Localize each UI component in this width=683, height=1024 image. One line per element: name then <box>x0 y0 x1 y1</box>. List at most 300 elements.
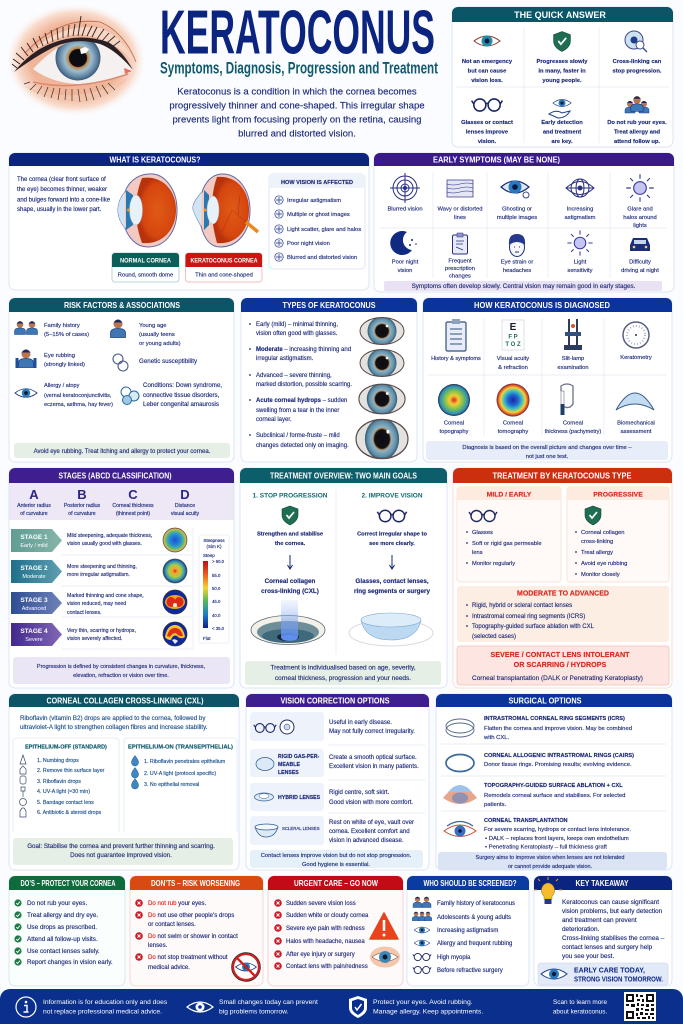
goal 2: improve vision: 2. IMPROVE VISION <box>361 492 423 500</box>
note: diagnosis: Diagnosis is based on the overall picture and changes over time – <box>462 445 632 451</box>
abcd header: of curvature <box>68 511 96 517</box>
panel: don'ts <box>130 876 263 986</box>
option: glasses <box>250 712 415 741</box>
takeaway text: deterioration. <box>562 926 600 933</box>
quick answer texts: Progresses slowly <box>537 59 588 65</box>
illustration: cxl eye <box>251 600 325 644</box>
card: mild / early: Soft or rigid gas permeable <box>472 541 542 547</box>
illustration: contact lens <box>349 613 433 646</box>
note: symptoms develop slowly: Symptoms often develop slowly. Central vision may remain good in early stages. <box>412 283 636 290</box>
card: moderate to advanced <box>457 586 669 642</box>
note: treatment individualised <box>245 661 441 685</box>
icon: warning triangle <box>370 913 398 939</box>
box: how vision is affected: HOW VISION IS AFFECTED <box>281 180 353 186</box>
abcd header: Posterior radius <box>64 503 101 509</box>
card: severe <box>457 646 669 685</box>
footer bar <box>0 989 683 1024</box>
panel: the quick answer <box>452 7 673 147</box>
takeaway text: vision problems, but early detection <box>562 908 663 915</box>
type descriptions: irregular astigmatism. <box>256 356 314 362</box>
note: avoid eye rubbing: Avoid eye rubbing. Treat itching and allergy to protect your cornea. <box>34 449 211 455</box>
option: transplantation: • Penetrating Keratoplasty – full thickness graft <box>485 844 607 850</box>
option: transplantation: CORNEAL TRANSPLANTATION <box>484 818 568 824</box>
icon: prescription clipboard <box>452 233 468 254</box>
option: icrs: with CXL. <box>483 735 510 741</box>
card: progressive: cross-linking <box>581 539 613 545</box>
panel: stages abcd <box>9 468 234 688</box>
icon: eye chart: E <box>510 322 517 333</box>
heading: cxl: CORNEAL COLLAGEN CROSS-LINKING (CXL) <box>46 696 204 706</box>
intro text: Keratoconus is a condition in which the cornea becomes <box>177 86 417 98</box>
card: severe: Corneal transplantation (DALK or Penetrating Keratoplasty) <box>472 675 643 682</box>
card: progressive: Treat allergy <box>581 550 613 556</box>
diagnosis labels: tomography <box>498 429 528 435</box>
epithelium-off box: 5. Bandage contact lens <box>37 800 94 806</box>
abcd header: Corneal thickness <box>112 503 154 509</box>
stage 2: more irregular astigmatism. <box>67 572 130 578</box>
screening list: Increasing astigmatism <box>437 928 498 934</box>
goal 1: stop progression: the cornea. <box>275 541 306 547</box>
icon: corneal topography <box>438 384 470 416</box>
stage 3 <box>11 590 187 616</box>
definition text: shape, usually in the lower part. <box>17 207 102 213</box>
card: progressive: PROGRESSIVE <box>593 492 643 498</box>
stage 1: Early / mild <box>20 543 48 549</box>
cxl intro: Riboflavin (vitamin B2) drops are applied to the cornea, followed by <box>20 715 206 722</box>
symptom labels: changes <box>449 274 471 280</box>
heading: what is keratoconus: WHAT IS KERATOCONUS? <box>110 154 200 164</box>
screening list: Adolescents & young adults <box>437 915 511 921</box>
risk: conditions: connective tissue disorders, <box>143 392 220 399</box>
screening list: High myopia <box>437 955 471 961</box>
abcd header: Anterior radius <box>17 503 51 509</box>
do's list: Do not rub your eyes. <box>27 900 87 907</box>
quick answer texts: Cross-linking can <box>613 59 662 65</box>
icon: shield <box>554 32 570 52</box>
note: treatment individualised: Treatment is individualised based on age, severity, <box>270 664 416 672</box>
heading: urgent care: URGENT CARE – GO NOW <box>294 878 378 888</box>
risk: conditions <box>143 382 222 408</box>
footer: small changes: big problems tomorrow. <box>219 1008 289 1016</box>
panel: key takeaway <box>534 876 672 986</box>
risk: young age: Young age <box>139 323 167 329</box>
note: goal <box>13 838 233 865</box>
subtitle: Symptoms, Diagnosis, Progression and Treatment <box>160 60 438 78</box>
note: diagnosis: not just one test. <box>526 454 569 460</box>
epithelium-on box: 1. Riboflavin penetrates epithelium <box>144 759 226 765</box>
intro text: progressively thinner and cone-shaped. This irregular shape <box>169 100 425 112</box>
label: keratoconus cornea <box>186 253 262 282</box>
panel: do's <box>9 876 125 986</box>
icon: cross-linking eye <box>625 31 647 52</box>
heading: don'ts: DON’TS – RISK WORSENING <box>151 878 240 888</box>
screening list: Allergy and frequent rubbing <box>437 941 512 947</box>
option: glasses: Useful in early disease. <box>329 719 392 726</box>
do's list: Use contact lenses safely. <box>27 948 100 955</box>
panel: who should be screened <box>407 876 529 986</box>
steepness legend: Steepness <box>203 538 225 543</box>
risk: allergy <box>44 383 113 408</box>
definition text <box>17 177 111 213</box>
symptom labels: driving at night <box>621 268 659 274</box>
icon: eye <box>370 946 400 968</box>
option: hybrid: Good vision with more comfort. <box>329 799 413 806</box>
icon: target / blurred vision <box>390 173 420 203</box>
footer: small changes <box>219 999 318 1016</box>
box: how vision is affected: Multiple or ghost images <box>287 212 350 218</box>
risk: eye rubbing: (strongly linked) <box>44 362 85 368</box>
icon: shield <box>349 996 367 1018</box>
note: progression: elevation, refraction or vision over time. <box>73 673 169 679</box>
icon: ghost eye <box>501 180 529 198</box>
steepness legend: 45.0 <box>212 599 221 604</box>
card: severe: OR SCARRING / HYDROPS <box>514 660 607 669</box>
stage 1: Mild steepening, adequate thickness, <box>67 533 152 539</box>
diagnosis labels <box>431 355 655 435</box>
epithelium-on box: 2. UV-A light (protocol specific) <box>144 771 216 777</box>
takeaway text: and treatment can prevent <box>562 917 637 924</box>
abcd header: C <box>128 487 138 502</box>
epithelium-on box <box>124 738 237 832</box>
quick answer texts: vision loss. <box>471 78 503 84</box>
heading: types: TYPES OF KERATOCONUS <box>282 300 376 310</box>
stage 1 <box>11 528 187 552</box>
footer: information: not replace professional medical advice. <box>43 1008 162 1016</box>
epithelium-on box: EPITHELIUM-ON (TRANSEPITHELIAL) <box>128 744 233 750</box>
epithelium-on box: 3. No epithelial removal <box>144 782 199 788</box>
card: moderate to advanced: Intrastromal corneal ring segments (ICRS) <box>472 614 585 620</box>
icon: conditions <box>121 387 139 404</box>
card: mild / early <box>457 487 561 582</box>
stage 3: vision reduced, may need <box>67 601 126 607</box>
epithelium-off box <box>13 738 119 832</box>
don'ts list: Do not rub your eyes. <box>148 900 207 907</box>
card: mild / early: lens <box>472 550 483 556</box>
symptom labels: prescription <box>445 266 475 272</box>
icon: young person <box>110 320 126 338</box>
note: progression: Progression is defined by consistent changes in curvature, thickness, <box>37 664 206 670</box>
abcd header: B <box>77 487 87 502</box>
type descriptions: swelling from a tear in the inner <box>256 408 339 414</box>
label: normal cornea: Round, smooth dome <box>118 272 173 278</box>
symptom labels: Blurred vision <box>387 206 423 212</box>
abcd header: visual acuity <box>171 511 200 517</box>
heading: early symptoms: EARLY SYMPTOMS (MAY BE NONE) <box>433 154 560 164</box>
steepness legend: 55.0 <box>212 573 221 578</box>
icon: family <box>14 321 38 334</box>
symptom labels: Wavy or distorted <box>438 206 482 212</box>
panel: surgical options <box>436 694 672 870</box>
don'ts list: lenses. <box>148 942 168 949</box>
stage 1: vision usually good with glasses. <box>67 541 142 547</box>
symptom labels: lights <box>633 223 647 229</box>
stage 2: Moderate <box>22 574 46 580</box>
risk: conditions: Leber congenital amaurosis <box>143 401 219 408</box>
box: how vision is affected: Poor night vision <box>287 241 330 247</box>
urgent list: Contact lens with pain/redness <box>286 964 368 970</box>
option: hybrid: HYBRID LENSES <box>278 795 321 801</box>
definition text: The cornea (clear front surface of <box>17 177 106 183</box>
card: progressive: Corneal collagen <box>581 530 625 536</box>
definition text: the eye) becomes thinner, weaker <box>17 187 107 193</box>
card: moderate to advanced: Topography-guided surface ablation with CXL <box>472 624 595 630</box>
symptom labels: sensitivity <box>567 268 593 274</box>
option: rigid gas-permeable: LENSES <box>278 770 299 776</box>
panel: urgent care <box>268 876 403 986</box>
note: progression <box>13 657 230 684</box>
steepness legend: Flat <box>203 636 211 641</box>
option: hybrid: Rigid centre, soft skirt. <box>329 789 390 796</box>
type descriptions: Acute corneal hydrops – sudden <box>256 398 347 404</box>
stage 4: Severe <box>25 637 43 643</box>
icon: keratometry dial <box>623 322 649 348</box>
icon: light sensitivity <box>567 230 593 256</box>
option: scleral: Rest on white of eye, vault over <box>329 819 414 826</box>
icon: car <box>630 238 650 251</box>
card: mild / early: Monitor regularly <box>472 561 515 567</box>
box: how vision is affected: Irregular astigmatism <box>287 198 341 204</box>
goal 1: stop progression: Strengthen and stabilise <box>257 532 323 538</box>
goal 2: improve vision: see more clearly. <box>369 541 415 547</box>
heading: who should be screened: WHO SHOULD BE SCREENED? <box>424 878 516 888</box>
risk: young age: (usually teens <box>139 332 175 338</box>
heading: do's: DO’S – PROTECT YOUR CORNEA <box>20 878 116 888</box>
risk: family history: (5–15% of cases) <box>44 332 89 338</box>
note: contact lenses: Contact lenses improve vision but do not stop progression. <box>261 853 412 859</box>
stage 2: STAGE 2 <box>20 565 48 572</box>
diagnosis labels: examination <box>557 365 589 371</box>
abcd header: of curvature <box>20 511 48 517</box>
icon: glasses <box>472 99 502 111</box>
don'ts list: or contact lenses. <box>148 921 196 928</box>
do's list: Use drops as prescribed. <box>27 924 97 931</box>
steepness legend: > 60.0 <box>212 559 225 564</box>
type descriptions: vision often good with glasses. <box>256 331 338 337</box>
card: moderate to advanced: Rigid, hybrid or scleral contact lenses <box>472 603 572 609</box>
option: hybrid <box>250 783 413 811</box>
epithelium-off box: 6. Antibiotic & steroid drops <box>37 810 102 816</box>
panel: treatment by keratoconus type <box>453 468 672 688</box>
label: keratoconus cornea: Thin and cone-shaped <box>195 272 253 278</box>
symptom labels: Increasing <box>567 206 593 212</box>
don'ts list: Do not stop treatment without <box>148 954 228 961</box>
card: progressive: Avoid eye rubbing <box>581 561 627 567</box>
risk: genetic susceptibility: Genetic susceptibility <box>139 358 198 365</box>
card: mild / early: Glasses <box>472 530 493 536</box>
quick answer texts <box>461 59 667 145</box>
panel: cross-linking <box>9 694 239 870</box>
box: how vision is affected: Blurred and distorted vision <box>287 255 357 261</box>
option: cairs: Donor tissue rings. Promising results; evolving evidence. <box>484 762 632 768</box>
heading: diagnosed: HOW KERATOCONUS IS DIAGNOSED <box>474 300 610 310</box>
risk: young age <box>139 323 181 347</box>
steepness legend: 40.0 <box>212 613 221 618</box>
card: progressive <box>567 487 669 582</box>
symptom labels: lines <box>454 215 466 221</box>
symptom labels: Difficulty <box>629 260 651 266</box>
urgent list: Sudden severe vision loss <box>286 901 356 907</box>
diagnosis labels: Biomechanical <box>617 420 655 426</box>
heading: quick answer: THE QUICK ANSWER <box>514 10 606 20</box>
screening list <box>412 897 515 974</box>
type descriptions: Advanced – severe thinning, <box>256 373 332 379</box>
steepness legend: 50.0 <box>212 586 221 591</box>
icon: eye rubbing <box>17 350 35 368</box>
note: treatment individualised: corneal thickness, progression and your needs. <box>275 675 411 682</box>
urgent list: Sudden white or cloudy cornea <box>286 913 369 919</box>
takeaway text <box>562 899 665 960</box>
icon: face headache <box>509 234 525 256</box>
symptom labels: astigmatism <box>565 215 596 221</box>
option: scleral: cornea. Excellent comfort and <box>329 828 410 835</box>
type descriptions <box>249 322 352 449</box>
panel: risk factors <box>9 298 234 462</box>
urgent list: Severe eye pain with redness <box>286 926 365 932</box>
intro text: prevents light from focusing properly on the retina, causing <box>172 114 422 126</box>
quick answer texts: stop progression. <box>613 68 662 74</box>
diagnosis labels: Visual acuity <box>497 356 529 362</box>
goal 1: stop progression: Corneal collagen <box>265 578 316 585</box>
qr code <box>624 992 656 1021</box>
stage 3: Advanced <box>22 606 46 612</box>
diagnosis labels: Corneal <box>563 420 583 426</box>
do's list: Treat allergy and dry eye. <box>27 912 98 919</box>
screening list: Family history of keratoconus <box>437 901 515 907</box>
quick answer texts: Treat allergy and <box>614 130 660 136</box>
callout: early care today: EARLY CARE TODAY, <box>574 966 645 974</box>
icon: glare <box>626 174 654 202</box>
footer: scan: about keratoconus. <box>553 1008 607 1016</box>
type descriptions: changes detected only on imaging. <box>256 443 349 449</box>
quick answer texts: lenses improve <box>466 130 509 136</box>
icon: info <box>16 997 36 1017</box>
option: topography-guided: TOPOGRAPHY-GUIDED SURFACE ABLATION + CXL <box>484 783 623 789</box>
abcd header: D <box>180 487 190 502</box>
risk: eye rubbing <box>44 353 85 368</box>
note: surgery aims: or cannot provide adequate vision. <box>508 864 593 870</box>
symptom labels: Ghosting or <box>502 206 532 212</box>
option: glasses: May not fully correct irregularity. <box>329 728 415 735</box>
risk: allergy: (vernal keratoconjunctivitis, <box>44 393 112 399</box>
stage 3: Marked thinning and cone shape, <box>67 593 144 599</box>
symptom labels: halos around <box>623 215 657 221</box>
heading: risk factors: RISK FACTORS & ASSOCIATIONS <box>64 300 180 310</box>
note: contact lenses <box>250 850 423 868</box>
option: topography-guided: patients. <box>484 802 507 808</box>
note: goal: Goal: Stabilise the cornea and prevent further thinning and scarring. <box>27 843 215 850</box>
goal 1: stop progression: cross-linking (CXL) <box>261 588 319 595</box>
icon: eye in hand <box>549 100 571 118</box>
goal 2: improve vision <box>354 492 430 595</box>
footer: scan: Scan to learn more <box>553 999 607 1006</box>
label: normal cornea <box>112 253 179 282</box>
epithelium-off box: 2. Remove thin surface layer <box>37 768 105 774</box>
steepness legend <box>199 535 229 643</box>
icon: slit lamp <box>564 319 582 350</box>
option: rigid gas-permeable: RIGID GAS-PER- <box>278 754 319 760</box>
don'ts list: Do not use other people’s drops <box>148 912 234 919</box>
abcd header: A <box>29 487 39 502</box>
panel: what is keratoconus <box>9 153 369 290</box>
heading: vision correction: VISION CORRECTION OPTIONS <box>280 696 390 706</box>
option: transplantation <box>444 818 631 850</box>
goal 2: improve vision: Correct irregular shape to <box>357 532 427 538</box>
eye: moderate <box>360 348 404 378</box>
stage 3: contact lenses. <box>67 610 102 616</box>
icon: eye chart: T O Z <box>505 342 521 348</box>
icon: do not rub eye <box>232 953 260 981</box>
symptom labels: headaches <box>503 268 531 274</box>
note: symptoms develop slowly <box>384 281 662 291</box>
note: surgery aims: Surgery aims to improve vision when lenses are not tolerated <box>476 855 624 861</box>
don'ts list: Do not swim or shower in contact <box>148 933 238 940</box>
icon: corneal tomography <box>496 384 530 416</box>
option: rigid gas-permeable: Create a smooth optical surface. <box>329 754 417 761</box>
panel: types of keratoconus <box>241 298 417 462</box>
risk: allergy: eczema, asthma, hay fever) <box>44 402 113 408</box>
eye: advanced <box>359 383 405 415</box>
quick answer texts: in many, faster in <box>538 68 586 74</box>
goal 1: stop progression: 1. STOP PROGRESSION <box>253 492 328 500</box>
option: topography-guided: Remodels corneal surface and stabilises. For selected <box>484 793 625 799</box>
stage 4 <box>11 622 187 646</box>
diagnosis labels: History & symptoms <box>431 356 481 362</box>
diagnosis labels: Corneal <box>503 420 523 426</box>
type descriptions: marked distortion, possible scarring. <box>256 382 352 388</box>
screening list: Before refractive surgery <box>437 968 503 974</box>
risk: family history <box>44 323 89 338</box>
takeaway text: Keratoconus can cause significant <box>562 899 659 906</box>
type descriptions: Moderate – increasing thinning and <box>256 347 351 353</box>
diagnosis labels: Keratometry <box>620 355 652 361</box>
cxl intro <box>20 715 208 731</box>
callout: early care today <box>538 963 668 985</box>
symptom labels <box>387 206 659 280</box>
quick answer texts: young people. <box>542 78 582 84</box>
heading: treatment overview: TREATMENT OVERVIEW: TWO MAIN GOALS <box>270 470 417 480</box>
icon: eye <box>474 36 500 46</box>
option: cairs <box>446 753 634 772</box>
epithelium-off box: 3. Riboflavin drops <box>37 779 81 785</box>
heading: surgical options: SURGICAL OPTIONS <box>508 696 582 706</box>
risk: allergy: Allergy / atopy <box>44 383 80 389</box>
option: icrs <box>446 716 632 741</box>
symptom labels: Frequent <box>448 258 472 264</box>
note: contact lenses: Good hygiene is essential. <box>302 862 370 868</box>
do's list: Attend all follow-up visits. <box>27 936 98 943</box>
symptom labels: Eye strain or <box>501 260 533 266</box>
footer: protect your eyes: Manage allergy. Keep appointments. <box>373 1008 483 1016</box>
option: scleral: SCLERAL LENSES <box>282 826 320 831</box>
risk: eye rubbing: Eye rubbing <box>44 353 75 359</box>
icon: genes <box>113 354 128 371</box>
stage 3: STAGE 3 <box>20 597 48 604</box>
symptom labels: Light <box>574 260 587 266</box>
quick answer texts: and treatment <box>543 130 581 136</box>
note: avoid eye rubbing <box>14 443 230 458</box>
steepness legend: (Sim K) <box>206 544 222 549</box>
diagnosis labels: Slit-lamp <box>562 356 584 362</box>
icon: eye chart <box>502 320 524 350</box>
panel: treatment overview <box>240 468 447 688</box>
quick answer texts: but can cause <box>468 68 507 74</box>
title: KERATOCONUS <box>160 0 435 68</box>
panel: how keratoconus is diagnosed <box>423 298 672 462</box>
label: normal cornea: NORMAL CORNEA <box>120 258 171 264</box>
symptom labels: Poor night <box>392 260 419 266</box>
option: topography-guided <box>443 783 625 808</box>
goal 1: stop progression <box>253 492 328 595</box>
